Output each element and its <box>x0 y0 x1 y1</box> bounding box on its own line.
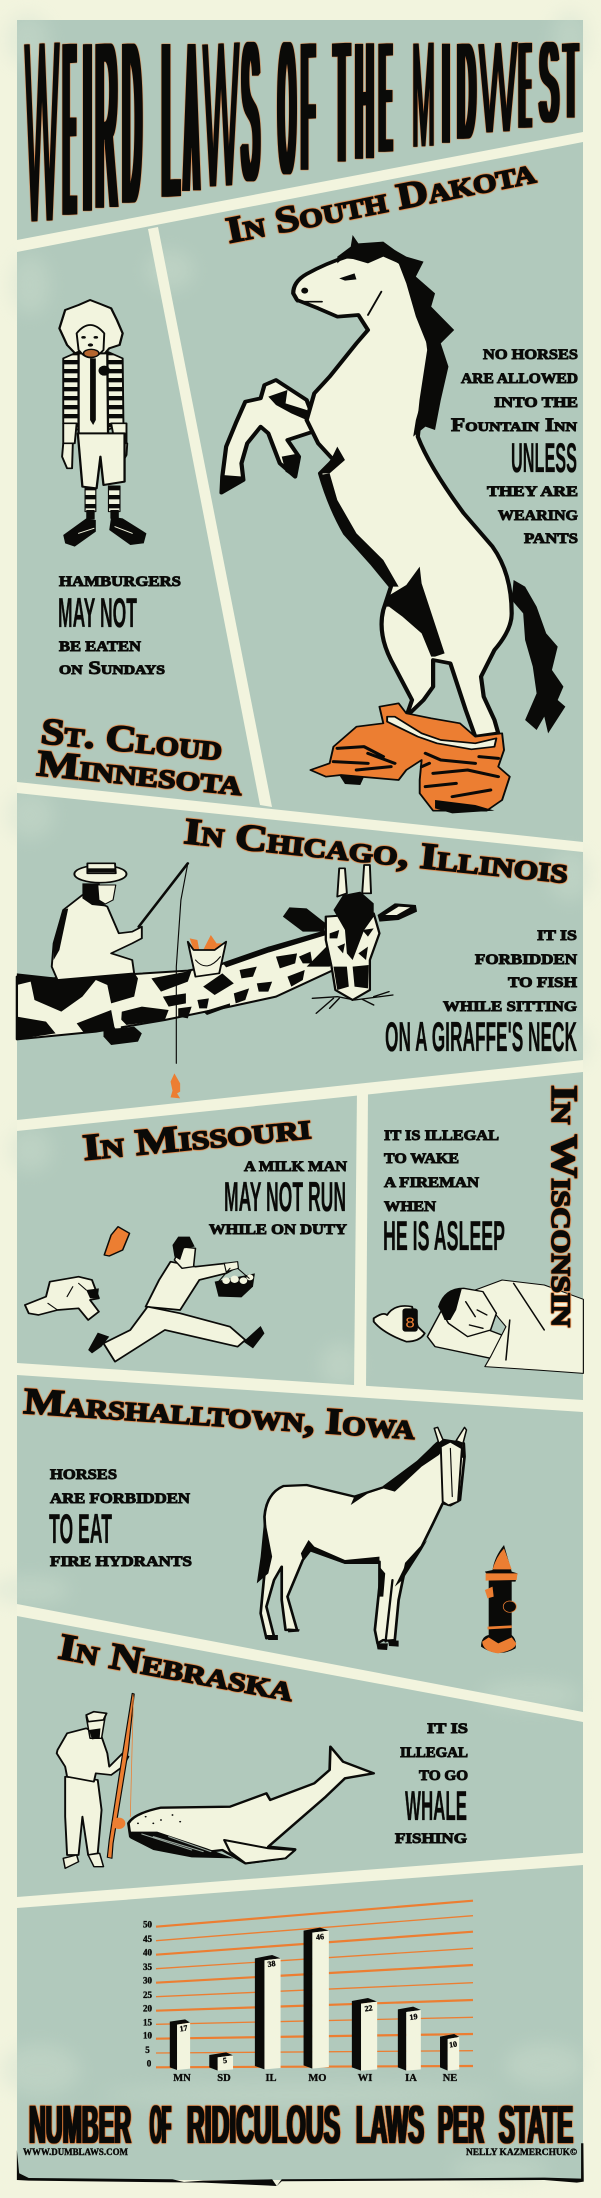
y axis labels: 50 <box>143 1919 152 1929</box>
y axis labels: 30 <box>143 1975 152 1985</box>
heading: st. cloud minnesota <box>35 711 244 804</box>
chart title: NUMBER <box>29 2095 131 2155</box>
bars <box>170 1928 459 2071</box>
heading: in nebraska: In Nebraska <box>55 1627 297 1710</box>
illustration: horse and fire hydrant <box>257 1427 517 1653</box>
x axis labels: IL <box>265 2073 277 2084</box>
text: illinois law: IT IS <box>537 928 577 944</box>
y axis labels <box>143 1919 152 2068</box>
text: iowa law <box>49 1467 192 1570</box>
text: south dakota law <box>451 347 578 547</box>
heading: in missouri: In Missouri <box>81 1106 313 1169</box>
illustration: man fishing on giraffe <box>17 863 417 1098</box>
text: nebraska law: TO GO <box>419 1768 468 1784</box>
text: minnesota law: BE EATEN <box>59 639 141 655</box>
heading: st. cloud minnesota: Minnesota <box>35 743 244 804</box>
panel gutters <box>17 132 583 1908</box>
text: south dakota law: Fountain Inn <box>451 415 578 436</box>
main title: A <box>185 0 198 237</box>
rough print edge at bottom <box>17 2143 584 2186</box>
y axis labels: 45 <box>143 1934 152 1944</box>
text: wisconsin law: TO WAKE <box>384 1151 459 1167</box>
bar value labels: 46 <box>315 1932 325 1942</box>
illustration: running milk man <box>25 1227 264 1362</box>
main title <box>25 0 577 277</box>
main title: M <box>412 12 435 180</box>
y axis labels: 0 <box>147 2058 152 2068</box>
main title: I <box>443 14 449 174</box>
text: south dakota law: INTO THE <box>494 395 578 411</box>
main title: W <box>479 15 517 161</box>
main title: L <box>162 0 179 245</box>
main title: E <box>520 16 530 154</box>
main title: W <box>203 0 239 232</box>
bar value labels: 22 <box>364 2003 373 2013</box>
illustration: sleeping fireman: 8 <box>405 1315 415 1331</box>
x axis labels: NE <box>443 2073 457 2084</box>
x axis labels: MO <box>308 2073 326 2084</box>
text: illinois law <box>385 928 577 1060</box>
text: minnesota law: HAMBURGERS <box>59 574 181 590</box>
source credit: WWW.DUMBLAWS.COM <box>23 2147 128 2157</box>
x axis labels: SD <box>217 2073 231 2084</box>
text: nebraska law: ILLEGAL <box>400 1745 468 1761</box>
main title: E <box>380 9 391 185</box>
illustration: sleeping fireman <box>374 1280 583 1373</box>
text: south dakota law: THEY ARE <box>487 484 578 500</box>
text: south dakota law: WEARING <box>498 508 578 524</box>
text: illinois law: TO FISH <box>508 975 577 991</box>
chart title: PER <box>438 2095 484 2155</box>
illustration: clown <box>59 300 146 547</box>
text: minnesota law: MAY NOT <box>58 589 137 636</box>
y axis labels: 40 <box>143 1947 152 1957</box>
main title: H <box>356 8 373 195</box>
text: illinois law: FORBIDDEN <box>475 952 577 968</box>
text: wisconsin law: WHEN <box>384 1199 436 1215</box>
text: nebraska law: FISHING <box>395 1831 467 1847</box>
bar value labels: 38 <box>267 1959 276 1969</box>
text: iowa law: FIRE HYDRANTS <box>50 1554 192 1570</box>
text: iowa law: TO EAT <box>49 1505 112 1552</box>
y axis labels: 5 <box>145 2045 150 2055</box>
bar value labels: 10 <box>448 2039 458 2050</box>
chart title: OF <box>150 2095 171 2155</box>
x axis labels: IA <box>405 2073 417 2084</box>
chart title <box>29 2095 573 2155</box>
bar value labels: 19 <box>409 2012 418 2022</box>
text: south dakota law: ARE ALLOWED <box>461 371 578 387</box>
illustration: fisherman and whale <box>57 1693 374 1868</box>
text: wisconsin law: IT IS ILLEGAL <box>384 1128 499 1144</box>
heading: in south dakota: In South Dakota <box>223 151 539 252</box>
heading: st. cloud minnesota: St. Cloud <box>39 711 224 769</box>
text: wisconsin law: A FIREMAN <box>384 1175 479 1191</box>
text: missouri law <box>209 1159 347 1238</box>
text: nebraska law <box>395 1721 468 1847</box>
text: iowa law: ARE FORBIDDEN <box>50 1491 190 1507</box>
chart title: LAWS <box>356 2095 424 2155</box>
text: missouri law: WHILE ON DUTY <box>209 1222 347 1238</box>
y axis labels: 20 <box>143 2003 152 2013</box>
main title: F <box>302 4 314 210</box>
main title: D <box>458 13 475 169</box>
y axis labels: 35 <box>143 1962 152 1972</box>
bar value labels <box>179 1932 458 2065</box>
text: missouri law: A MILK MAN <box>244 1159 347 1175</box>
x axis labels <box>173 2073 457 2084</box>
y axis labels: 25 <box>143 1990 152 2000</box>
text: south dakota law: PANTS <box>524 531 578 547</box>
text: iowa law: HORSES <box>50 1467 117 1483</box>
text: illinois law: WHILE SITTING <box>443 999 577 1015</box>
heading: in wisconsin: In Wisconsin <box>543 1085 584 1327</box>
text: south dakota law: NO HORSES <box>483 347 578 363</box>
bar value labels: 17 <box>179 2023 188 2033</box>
chart title: RIDICULOUS <box>187 2095 340 2155</box>
y axis labels: 10 <box>143 2031 152 2041</box>
author credit: NELLY KAZMERCHUK© <box>466 2147 577 2157</box>
main title: S <box>242 2 259 223</box>
text: nebraska law: IT IS <box>427 1721 468 1737</box>
x axis labels: WI <box>358 2073 372 2084</box>
chart gridlines <box>156 1901 473 2067</box>
illustration: rearing horse in pants <box>222 235 565 813</box>
infographic: MAY NOT RUN <box>224 1173 346 1220</box>
heading: marshalltown, iowa: Marshalltown, Iowa <box>22 1381 417 1448</box>
text: wisconsin law <box>383 1128 505 1259</box>
x axis labels: MN <box>173 2073 191 2084</box>
infographic: WHALE <box>405 1782 467 1829</box>
bar chart <box>143 1901 473 2084</box>
main title: T <box>334 6 349 199</box>
y axis labels: 15 <box>143 2017 152 2027</box>
text: minnesota law <box>58 574 181 679</box>
heading: in chicago, illinois: In Chicago, Illinois <box>182 811 570 892</box>
bar value labels: 5 <box>222 2056 228 2065</box>
text: minnesota law: on Sundays <box>59 658 165 679</box>
main title: O <box>279 3 295 213</box>
